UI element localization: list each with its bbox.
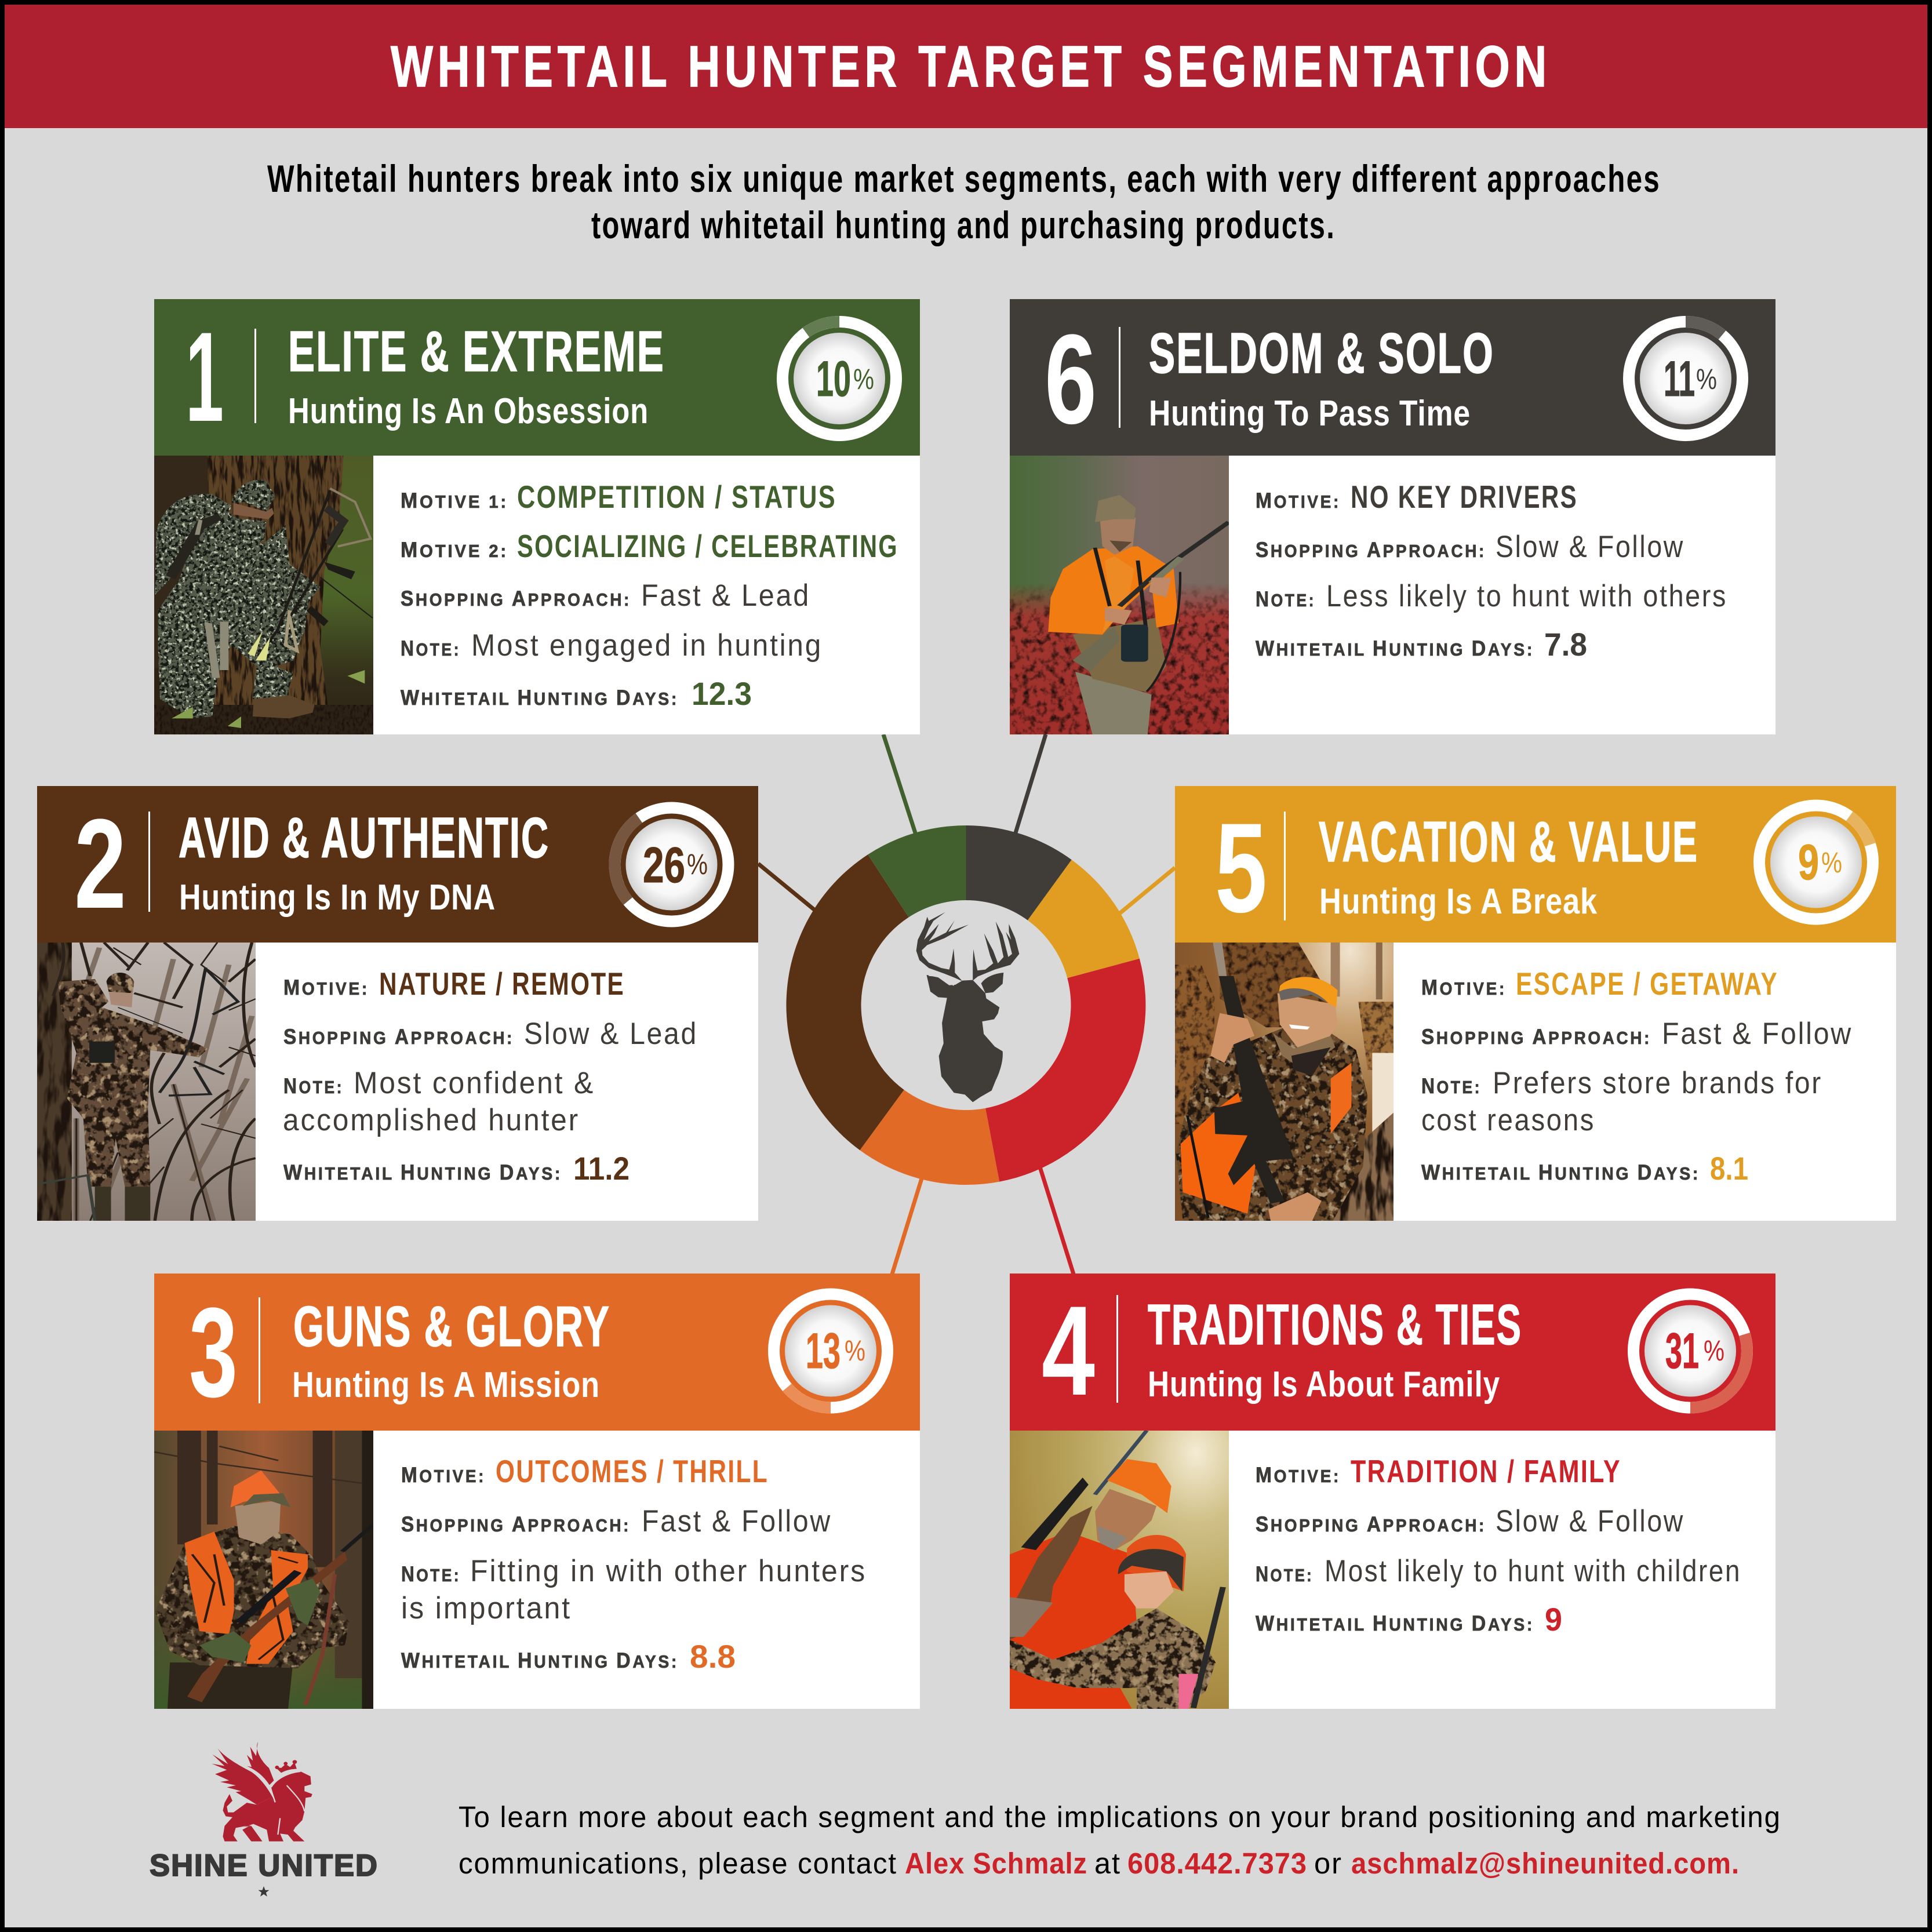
number 1: 1	[185, 305, 224, 448]
panel body	[1010, 299, 1775, 734]
hunting days: WHITETAIL HUNTING DAYS:	[401, 686, 679, 710]
panel 5: vacation and value: cost reasons	[1421, 1103, 1595, 1137]
man	[1075, 672, 1152, 734]
shopping approach: SHOPPING APPROACH:	[1256, 538, 1486, 562]
number 4: 4	[1042, 1279, 1095, 1422]
panel body	[154, 299, 920, 734]
panel 5: vacation and value: Fast & Follow	[1662, 1017, 1853, 1051]
number 2: 2	[74, 792, 126, 935]
panel 1: elite and extreme	[154, 299, 920, 734]
shopping approach: SHOPPING APPROACH:	[1256, 1512, 1486, 1536]
panel header	[1175, 786, 1896, 943]
panel 1: elite and extreme: Fast & Lead	[641, 578, 810, 613]
panel 3: guns and glory	[154, 1274, 920, 1709]
contact text: or	[1314, 1847, 1342, 1880]
heading: AVID & AUTHENTIC	[179, 806, 550, 869]
panel 6: seldom and solo: Slow & Follow	[1496, 530, 1684, 564]
shopping approach: SHOPPING APPROACH:	[1421, 1025, 1651, 1049]
panel 5: vacation and value: ESCAPE / GETAWAY	[1516, 966, 1778, 1002]
heading: SELDOM & SOLO	[1149, 321, 1494, 385]
motive 1: MOTIVE 1:	[401, 489, 508, 512]
note: NOTE:	[1256, 1562, 1314, 1586]
donut segment: guns and glory	[860, 1090, 999, 1185]
percent ring 9%: 9	[1798, 835, 1819, 890]
panel 1: elite and extreme: COMPETITION / STATUS	[517, 479, 836, 515]
heading: GUNS & GLORY	[293, 1294, 610, 1358]
panel 5: vacation and value: Prefers store brands for	[1493, 1066, 1822, 1100]
panel header	[1010, 299, 1775, 456]
shopping approach: SHOPPING APPROACH:	[401, 587, 631, 610]
percent ring 10%	[783, 322, 896, 435]
panel body	[1175, 786, 1896, 1221]
percent ring 26%: %	[687, 848, 708, 881]
shopping approach: SHOPPING APPROACH:	[283, 1025, 514, 1049]
subheading: Hunting Is A Mission	[292, 1365, 600, 1405]
subheading: Hunting Is A Break	[1319, 882, 1598, 922]
motive: MOTIVE:	[283, 976, 369, 999]
panel 2: avid and authentic: Most confident &	[354, 1066, 595, 1100]
panel 4: traditions and ties: Most likely to hunt with children	[1325, 1554, 1741, 1588]
heading: TRADITIONS & TIES	[1148, 1293, 1522, 1356]
photo: bowhunter drawing a bow in bare trees	[37, 943, 256, 1221]
panel 5: vacation and value: 8.1	[1710, 1150, 1748, 1187]
icon: winged crowned lion	[212, 1742, 312, 1842]
panel header	[1010, 1274, 1775, 1431]
branches	[53, 943, 256, 1221]
percent ring 11%: 11	[1664, 351, 1695, 407]
donut segment: seldom and solo	[966, 825, 1072, 920]
panel 3: guns and glory: is important	[401, 1591, 572, 1625]
note: NOTE:	[401, 1562, 461, 1586]
motive: MOTIVE:	[1421, 976, 1507, 999]
percent ring 31%: %	[1704, 1334, 1724, 1367]
intro text: toward whitetail hunting and purchasing products.	[591, 203, 1336, 246]
panel 4: traditions and ties: Slow & Follow	[1496, 1504, 1684, 1538]
panel 3: guns and glory: 8.8	[690, 1638, 736, 1675]
connector lines from donut to panels	[758, 734, 1175, 1274]
percent ring 10%: 10	[816, 351, 851, 407]
note: NOTE:	[401, 636, 461, 660]
motive: MOTIVE:	[401, 1463, 486, 1487]
hunting days: WHITETAIL HUNTING DAYS:	[1256, 1611, 1534, 1635]
percent ring 26%	[614, 808, 728, 922]
number 6: 6	[1045, 308, 1097, 450]
title banner: WHITETAIL HUNTER TARGET SEGMENTATION	[391, 34, 1551, 99]
donut segment: elite and extreme	[868, 825, 966, 917]
subheading: Hunting Is About Family	[1148, 1365, 1500, 1405]
note: NOTE:	[283, 1074, 344, 1098]
contact text: communications, please contact	[459, 1847, 897, 1880]
percent ring 10%: %	[853, 363, 874, 395]
percent ring 9%	[1759, 806, 1873, 919]
wordmark: SHINE UNITED	[150, 1849, 379, 1883]
donut segment: traditions and ties	[985, 959, 1145, 1182]
contact text	[459, 1800, 1781, 1880]
photo: smiling hunter holding a rifle	[1175, 943, 1393, 1221]
panel 4: traditions and ties	[1010, 1274, 1775, 1709]
panel 4: traditions and ties: 9	[1545, 1601, 1562, 1638]
donut segment: vacation and value	[1028, 860, 1140, 978]
panel header	[154, 1274, 920, 1431]
subheading: Hunting Is An Obsession	[288, 391, 649, 431]
shopping approach: SHOPPING APPROACH:	[401, 1512, 631, 1536]
number 5: 5	[1215, 796, 1267, 939]
panel 6: seldom and solo	[1004, 299, 1775, 737]
panel 2: avid and authentic: accomplished hunter	[283, 1103, 580, 1137]
intro text	[267, 157, 1661, 246]
panel header	[37, 786, 758, 943]
hunting days: WHITETAIL HUNTING DAYS:	[1256, 636, 1534, 660]
percent ring 11%	[1629, 322, 1742, 435]
percent ring 31%	[1633, 1294, 1747, 1407]
hunting days: WHITETAIL HUNTING DAYS:	[1421, 1160, 1700, 1184]
panel body	[1010, 1274, 1775, 1709]
number 3: 3	[189, 1281, 238, 1424]
heading: VACATION & VALUE	[1319, 810, 1698, 874]
percent ring 26%: 26	[643, 838, 685, 893]
panel 3: guns and glory: Fitting in with other hunters	[470, 1554, 867, 1588]
icon: star	[259, 1886, 269, 1897]
logo: Shine United	[150, 1742, 379, 1897]
icon: deer head	[916, 912, 1019, 1102]
contact text: aschmalz@shineunited.com.	[1351, 1847, 1740, 1880]
panel header	[154, 299, 920, 456]
motive: MOTIVE:	[1256, 489, 1341, 512]
panel 6: seldom and solo: 7.8	[1544, 626, 1587, 663]
note: NOTE:	[1421, 1074, 1482, 1098]
motive: MOTIVE:	[1256, 1463, 1341, 1487]
contact text: at	[1094, 1847, 1121, 1880]
panel 2: avid and authentic: NATURE / REMOTE	[379, 966, 625, 1002]
panel body	[37, 786, 758, 1221]
percent ring 11%: %	[1696, 363, 1717, 395]
panel 1: elite and extreme: SOCIALIZING / CELEBRATING	[517, 528, 898, 564]
donut segment: avid and authentic	[786, 854, 909, 1150]
panel 6: seldom and solo: Less likely to hunt with others	[1326, 579, 1727, 613]
panel body	[154, 1274, 920, 1709]
panel 1: elite and extreme: Most engaged in hunting	[471, 628, 823, 663]
contact text: Alex Schmalz	[905, 1847, 1087, 1880]
panel 2: avid and authentic	[32, 786, 758, 1227]
panel 3: guns and glory: Fast & Follow	[642, 1504, 832, 1538]
percent ring 31%: 31	[1665, 1323, 1699, 1379]
motive 2: MOTIVE 2:	[401, 538, 508, 562]
subheading: Hunting To Pass Time	[1149, 394, 1471, 434]
percent ring 9%: %	[1821, 846, 1842, 879]
photo: hunter in orange jacket in red brush	[1010, 456, 1229, 734]
subheading: Hunting Is In My DNA	[179, 878, 496, 918]
hunting days: WHITETAIL HUNTING DAYS:	[283, 1160, 562, 1184]
photo: hunter with rifle in pine forest	[154, 1431, 373, 1709]
contact text: 608.442.7373	[1127, 1847, 1307, 1880]
donut chart with deer	[786, 825, 1145, 1185]
percent ring 13%	[774, 1294, 887, 1407]
contact text: To learn more about each segment and the implications on your brand positioning and marketing	[459, 1800, 1781, 1833]
panel 2: avid and authentic: Slow & Lead	[524, 1017, 698, 1051]
panel 2: avid and authentic: 11.2	[573, 1150, 630, 1187]
title banner	[5, 5, 1927, 128]
note: NOTE:	[1256, 587, 1316, 611]
panel 3: guns and glory: OUTCOMES / THRILL	[496, 1453, 769, 1489]
photo: camouflaged bowhunter kneeling by a tree	[154, 456, 373, 734]
panel 6: seldom and solo: NO KEY DRIVERS	[1351, 479, 1578, 515]
percent ring 13%: %	[845, 1334, 865, 1367]
panel 4: traditions and ties: TRADITION / FAMILY	[1351, 1453, 1621, 1489]
panel 5: vacation and value	[1175, 786, 1896, 1221]
hunting days: WHITETAIL HUNTING DAYS:	[401, 1649, 679, 1672]
heading: ELITE & EXTREME	[288, 319, 665, 383]
percent ring 13%: 13	[806, 1323, 841, 1379]
panel 1: elite and extreme: 12.3	[692, 675, 752, 712]
background branches	[77, 948, 252, 1227]
photo: father and daughter hunters embracing	[1010, 1431, 1229, 1709]
